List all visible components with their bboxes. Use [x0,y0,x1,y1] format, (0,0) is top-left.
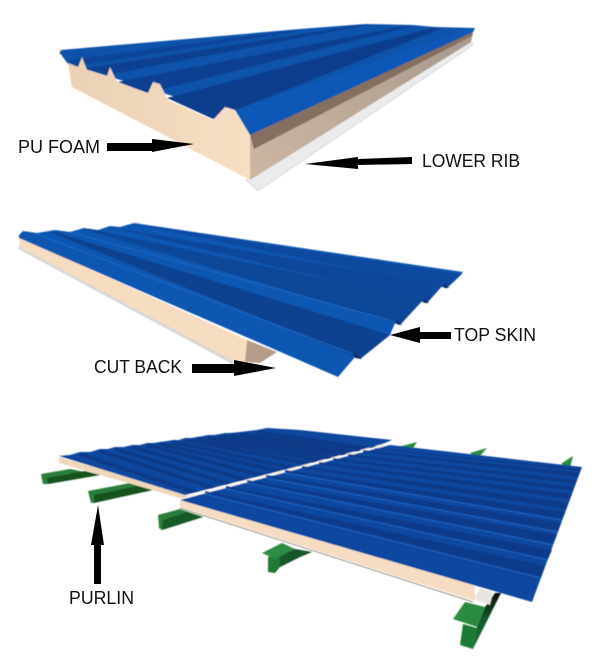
white scalloped joint [187,445,385,497]
arrow: cut back [192,360,276,376]
arrow: top skin [390,327,451,343]
shadow strip under top skin [250,31,473,149]
side face of foam [250,33,473,180]
left sheet foam edge [59,457,190,499]
label: cut back: CUT BACK [94,357,182,377]
cut back end [245,340,277,363]
arrow: purlin [91,505,104,584]
top skin [60,24,475,135]
arrow: PU foam [107,139,194,152]
right sheet corrugated skin [180,445,582,602]
lower rib [246,42,473,191]
panel: installed panels on purlins [41,428,582,649]
purlins [41,442,573,649]
label: PU foam: PU FOAM [18,137,100,157]
arrow: lower rib [305,157,412,169]
grey lower rib [19,246,233,364]
left sheet corrugated skin [59,428,392,495]
right sheet foam edge [180,500,475,601]
PU foam front face [68,57,250,180]
label: lower rib: LOWER RIB [422,151,520,171]
foam edge [19,237,247,362]
panel: sandwich panel with PU foam and lower rib [60,24,475,191]
top skin [19,223,463,377]
panel: sandwich panel with cut back and top skin [19,223,463,377]
cut back end with lower rib [475,588,493,605]
label: top skin: TOP SKIN [454,325,536,345]
label: purlin: PURLIN [69,588,134,608]
